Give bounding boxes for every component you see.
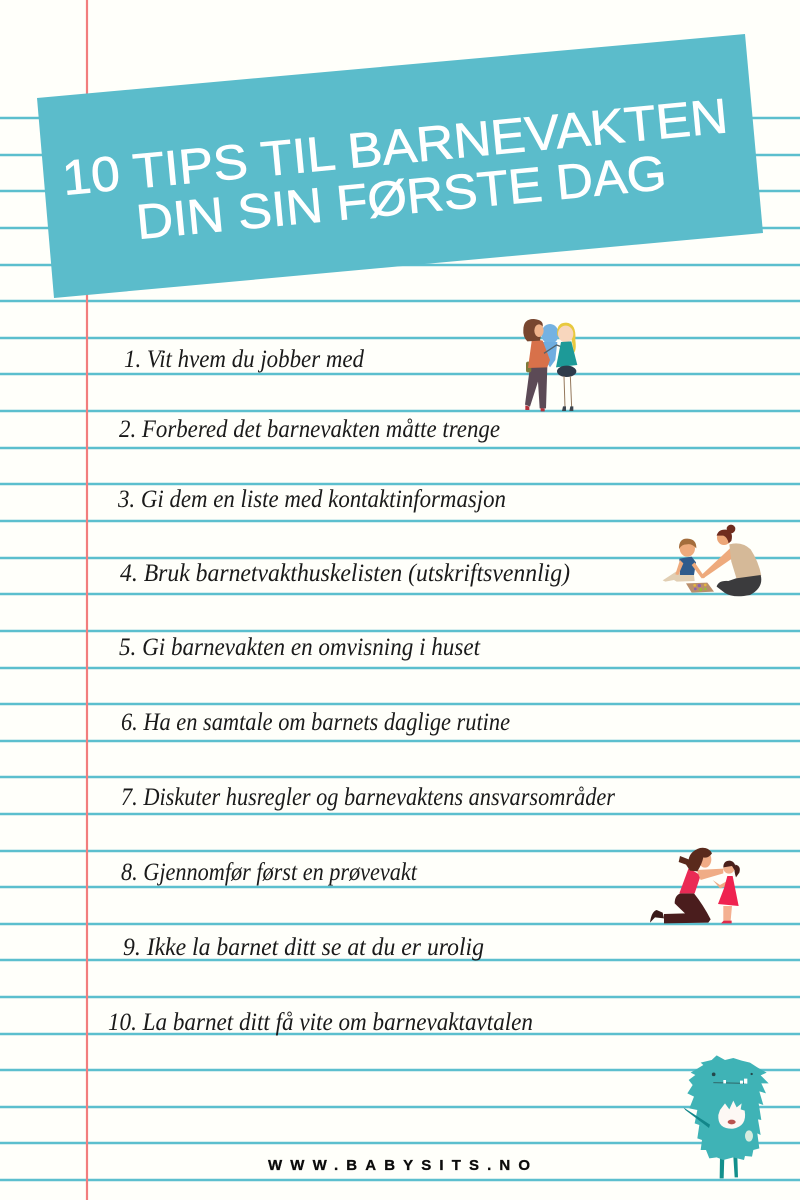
tip 9: 9. Ikke la barnet ditt se at du er urolig <box>123 934 484 961</box>
tip 5: 5. Gi barnevakten en omvisning i huset <box>119 634 481 661</box>
illustration: teal furry monster mascot <box>683 1055 769 1178</box>
title text: DIN SIN FØRSTE DAG <box>134 146 669 250</box>
illustration: mother and boy with board game <box>663 525 761 596</box>
title text <box>60 89 730 250</box>
tip 2: 2. Forbered det barnevakten måtte trenge <box>119 416 500 443</box>
tip 6: 6. Ha en samtale om barnets daglige rutine <box>121 709 510 736</box>
illustration: woman with baby and girl <box>523 319 577 411</box>
tip 1: 1. Vit hvem du jobber med <box>124 346 364 373</box>
tip 10: 10. La barnet ditt få vite om barnevaktavtalen <box>108 1009 533 1036</box>
tip 7: 7. Diskuter husregler og barnevaktens ansvarsområder <box>121 784 615 811</box>
tip 8: 8. Gjennomfør først en prøvevakt <box>121 859 418 886</box>
title text: 10 TIPS TIL BARNEVAKTEN <box>60 89 730 206</box>
tip 4: 4. Bruk barnetvakthuskelisten (utskriftsvennlig) <box>120 560 570 587</box>
tip 3: 3. Gi dem en liste med kontaktinformasjon <box>117 486 506 513</box>
tips list <box>108 346 615 1036</box>
website footer: WWW.BABYSITS.NO <box>268 1157 530 1174</box>
illustration: mother kneeling with daughter <box>650 848 740 923</box>
title banner <box>37 34 763 298</box>
